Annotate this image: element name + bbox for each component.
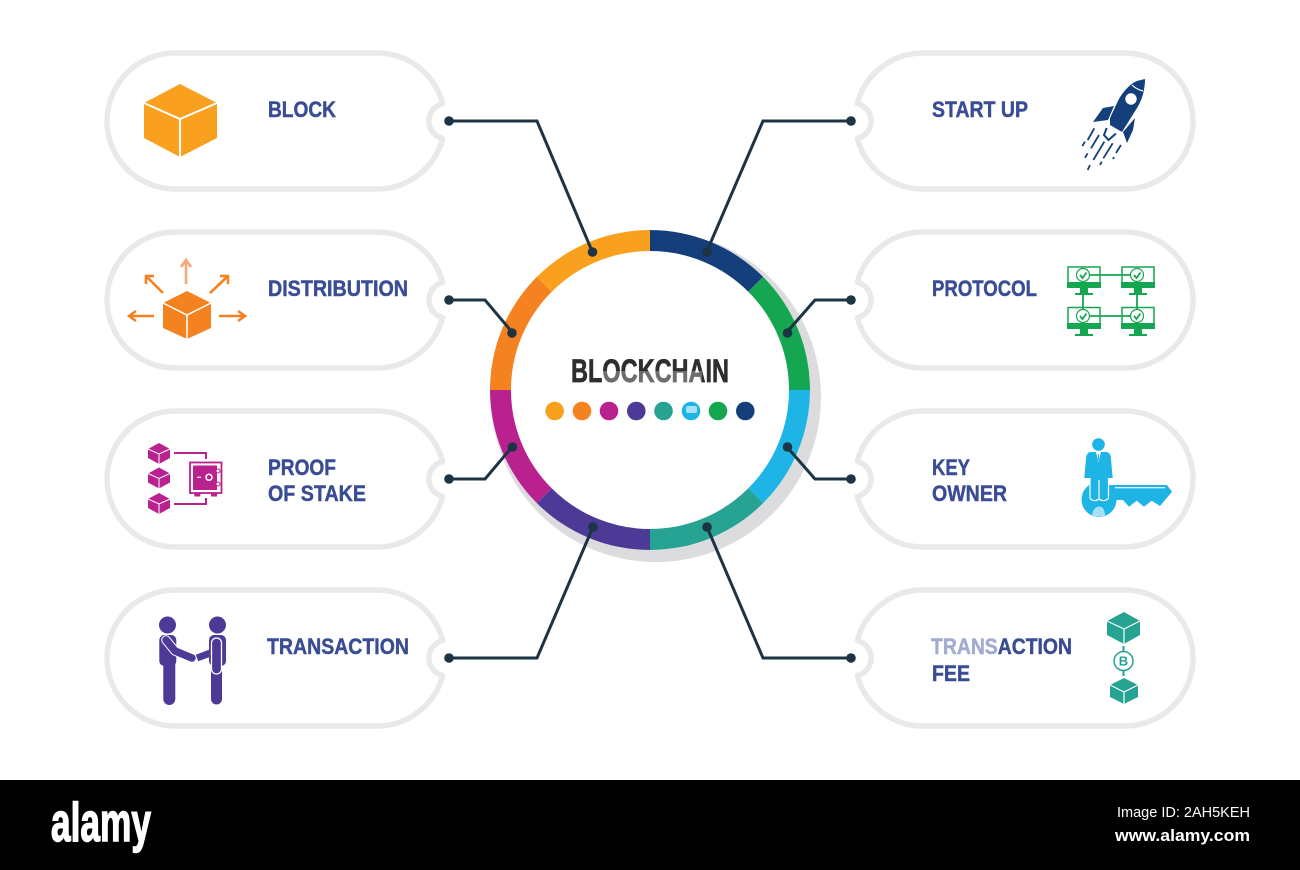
footer logo: alamy <box>51 791 151 853</box>
icon: amber cube <box>144 84 217 157</box>
connector: distribution <box>444 295 517 338</box>
panel: distribution <box>107 232 443 368</box>
center title: BLOCKCHAIN <box>571 353 729 389</box>
connector: key owner <box>783 442 856 484</box>
panel: block <box>107 53 443 189</box>
panel: transaction fee: FEE <box>932 661 970 686</box>
footer bar <box>0 780 1300 870</box>
connector: protocol <box>783 295 856 338</box>
connector: block <box>444 116 597 257</box>
panel: proof of stake: OF STAKE <box>268 481 366 506</box>
connector: proof of stake <box>444 442 517 484</box>
icon: cubes with bitcoin: B <box>1119 654 1128 668</box>
ring shadow <box>491 232 821 562</box>
footer url: www.alamy.com <box>1114 826 1250 845</box>
panel: key owner <box>857 411 1193 547</box>
panel: protocol: PROTOCOL <box>932 276 1037 301</box>
panel: distribution: DISTRIBUTION <box>268 276 408 301</box>
footer image id: Image ID: 2AH5KEH <box>1117 804 1250 821</box>
icon: cubes with bitcoin <box>1107 612 1140 704</box>
connector: start up <box>702 116 856 257</box>
icon: rocket <box>1082 79 1145 170</box>
segmented ring <box>490 230 810 550</box>
panel: start up: START UP <box>932 97 1028 122</box>
panel: transaction fee: TRANSACTION <box>931 634 1072 659</box>
panel: start up <box>857 53 1193 189</box>
panel: proof of stake <box>107 411 443 547</box>
panel: transaction: TRANSACTION <box>267 634 409 659</box>
panel: key owner: KEY <box>932 455 970 480</box>
panel: proof of stake: PROOF <box>268 455 336 480</box>
icon: handshake <box>159 616 226 699</box>
panel: key owner: OWNER <box>932 481 1007 506</box>
panel: transaction <box>107 590 443 726</box>
panel: protocol <box>857 232 1193 368</box>
icon: person standing on key <box>1082 438 1172 517</box>
panel: transaction fee <box>857 590 1193 726</box>
icon: cubes into safe <box>148 443 222 514</box>
icon: protocol network of monitors <box>1067 267 1155 336</box>
color dots row <box>545 402 755 420</box>
panel: block: BLOCK <box>268 97 336 122</box>
icon: cube with outward arrows <box>129 260 245 339</box>
connector: transaction fee <box>702 522 856 663</box>
connector: transaction <box>444 522 598 663</box>
